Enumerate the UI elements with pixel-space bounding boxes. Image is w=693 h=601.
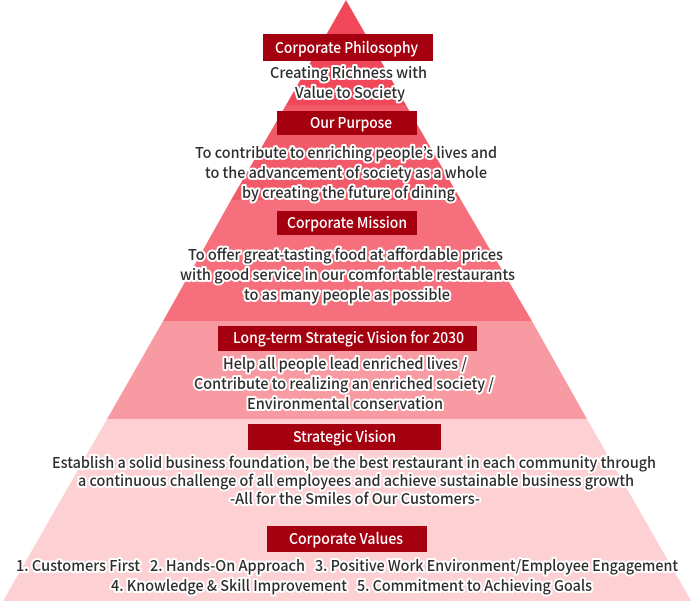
heading banner: Strategic Vision: Strategic Vision xyxy=(293,426,396,447)
text: philosophy statement: Creating Richness with xyxy=(270,62,427,83)
text: list of corporate values: 3. Positive Work Environment/Employee Engagement xyxy=(315,555,678,576)
heading banner: Corporate Values xyxy=(267,526,427,552)
heading banner: Strategic Vision xyxy=(248,424,441,450)
text: philosophy statement: Value to Society xyxy=(294,82,405,103)
text: mission statement: To offer great-tasting food at affordable prices xyxy=(188,244,503,265)
heading banner: Corporate Mission: Corporate Mission xyxy=(287,212,407,233)
text: purpose statement xyxy=(195,142,497,203)
text: strategic vision statement: a continuous challenge of all employees and achieve sustainable business growth xyxy=(78,470,634,491)
pyramid tier 4: Long-term Vision background xyxy=(107,321,587,419)
text: mission statement: to as many people as possible xyxy=(244,284,450,305)
section: Corporate Values xyxy=(16,526,678,596)
heading banner: Corporate Values: Corporate Values xyxy=(289,528,403,549)
text: long-term vision statement: Environmental conservation xyxy=(247,393,443,414)
section: Strategic Vision xyxy=(52,424,656,509)
text: philosophy statement xyxy=(270,62,427,103)
text: strategic vision statement: -All for the Smiles of Our Customers- xyxy=(230,488,480,509)
section: Corporate Philosophy xyxy=(263,34,433,103)
text: long-term vision statement: Contribute to realizing an enriched society / xyxy=(194,373,494,394)
text: strategic vision statement: Establish a solid business foundation, be the best restaurant in each community through xyxy=(52,452,656,473)
pyramid tier 1: Corporate Philosophy background xyxy=(286,0,406,105)
text: list of corporate values: 4. Knowledge & Skill Improvement xyxy=(111,575,347,596)
text: list of corporate values: 5. Commitment to Achieving Goals xyxy=(357,575,592,596)
heading banner: Our Purpose xyxy=(277,111,417,135)
heading banner: Long-term Strategic Vision for 2030: Long-term Strategic Vision for 2030 xyxy=(233,327,464,348)
pyramid tier 3: Corporate Mission background xyxy=(163,200,532,321)
text: strategic vision statement xyxy=(52,452,656,509)
section: Corporate Mission xyxy=(180,211,515,305)
text: mission statement: with good service in our comfortable restaurants xyxy=(180,264,515,285)
heading banner: Corporate Philosophy: Corporate Philosophy xyxy=(275,37,418,58)
heading banner: Our Purpose: Our Purpose xyxy=(310,112,392,133)
section: Long-term Strategic Vision xyxy=(194,326,494,414)
text: purpose statement: To contribute to enriching people’s lives and xyxy=(195,142,497,163)
text: list of corporate values xyxy=(16,555,678,596)
text: long-term vision statement xyxy=(194,353,494,414)
text: purpose statement: by creating the future of dining xyxy=(242,182,455,203)
pyramid tier 5: Strategic Vision and Values background xyxy=(3,419,693,601)
text: list of corporate values: 1. Customers First xyxy=(16,555,140,576)
text: mission statement xyxy=(180,244,515,305)
text: list of corporate values: 2. Hands-On Approach xyxy=(150,555,305,576)
pyramid tier 2: Our Purpose background xyxy=(231,105,461,200)
text: purpose statement: to the advancement of society as a whole xyxy=(205,162,487,183)
section: Our Purpose xyxy=(195,111,497,203)
text: long-term vision statement: Help all people lead enriched lives / xyxy=(223,353,467,374)
